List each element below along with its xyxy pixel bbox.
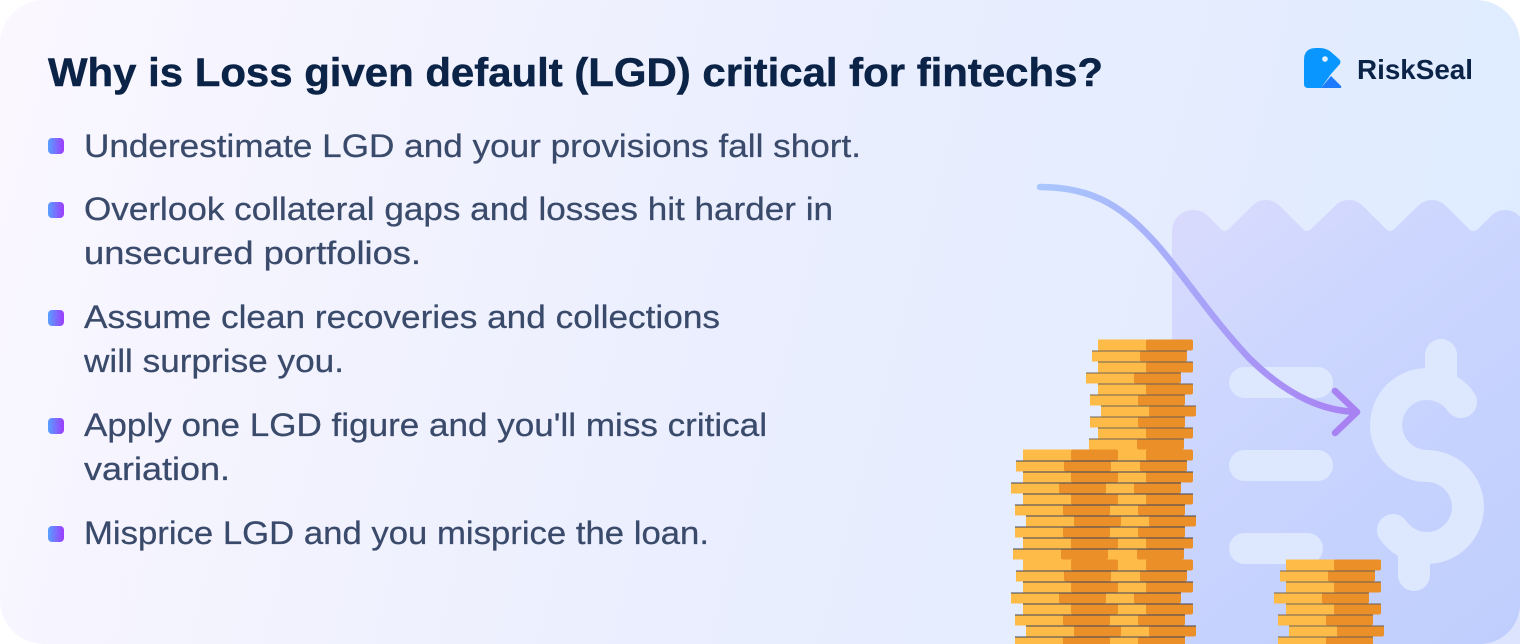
- wordmark: RiskSeal: [1357, 54, 1473, 85]
- bullet 3: will surprise you.: [83, 343, 344, 379]
- bullet 2: Overlook collateral gaps and losses hit harder in: [84, 191, 833, 227]
- dollar sign: [1386, 355, 1468, 575]
- coin stack: left column: [1011, 450, 1121, 644]
- bullet 5: Misprice LGD and you misprice the loan.: [84, 515, 709, 551]
- coin stack: small right: [1274, 560, 1384, 644]
- receipt line 3: [1229, 533, 1323, 564]
- bullet list: [48, 128, 861, 551]
- title: Why is Loss given default (LGD) critical for fintechs?: [48, 51, 1103, 95]
- corner tint: [1470, 594, 1520, 644]
- bullet 4: Apply one LGD figure and you'll miss critical: [84, 407, 767, 443]
- receipt line 1: [1229, 367, 1333, 398]
- bullet 3: [48, 299, 720, 379]
- bullet 2: [48, 191, 833, 271]
- bullet 1: Underestimate LGD and your provisions fall short.: [84, 128, 861, 164]
- bullet 4: [48, 407, 767, 487]
- bullet 4: variation.: [84, 451, 230, 487]
- coin stack: tall right column: [1086, 340, 1196, 644]
- receipt line 2: [1229, 450, 1333, 481]
- logo: RiskSeal: [1304, 48, 1473, 88]
- bullet 2: unsecured portfolios.: [84, 235, 421, 271]
- arrow: curved down into dollar sign: [1040, 187, 1357, 433]
- receipt illustration: [1172, 200, 1520, 644]
- icon: seal head: [1304, 48, 1341, 88]
- bullet 3: Assume clean recoveries and collections: [84, 299, 720, 335]
